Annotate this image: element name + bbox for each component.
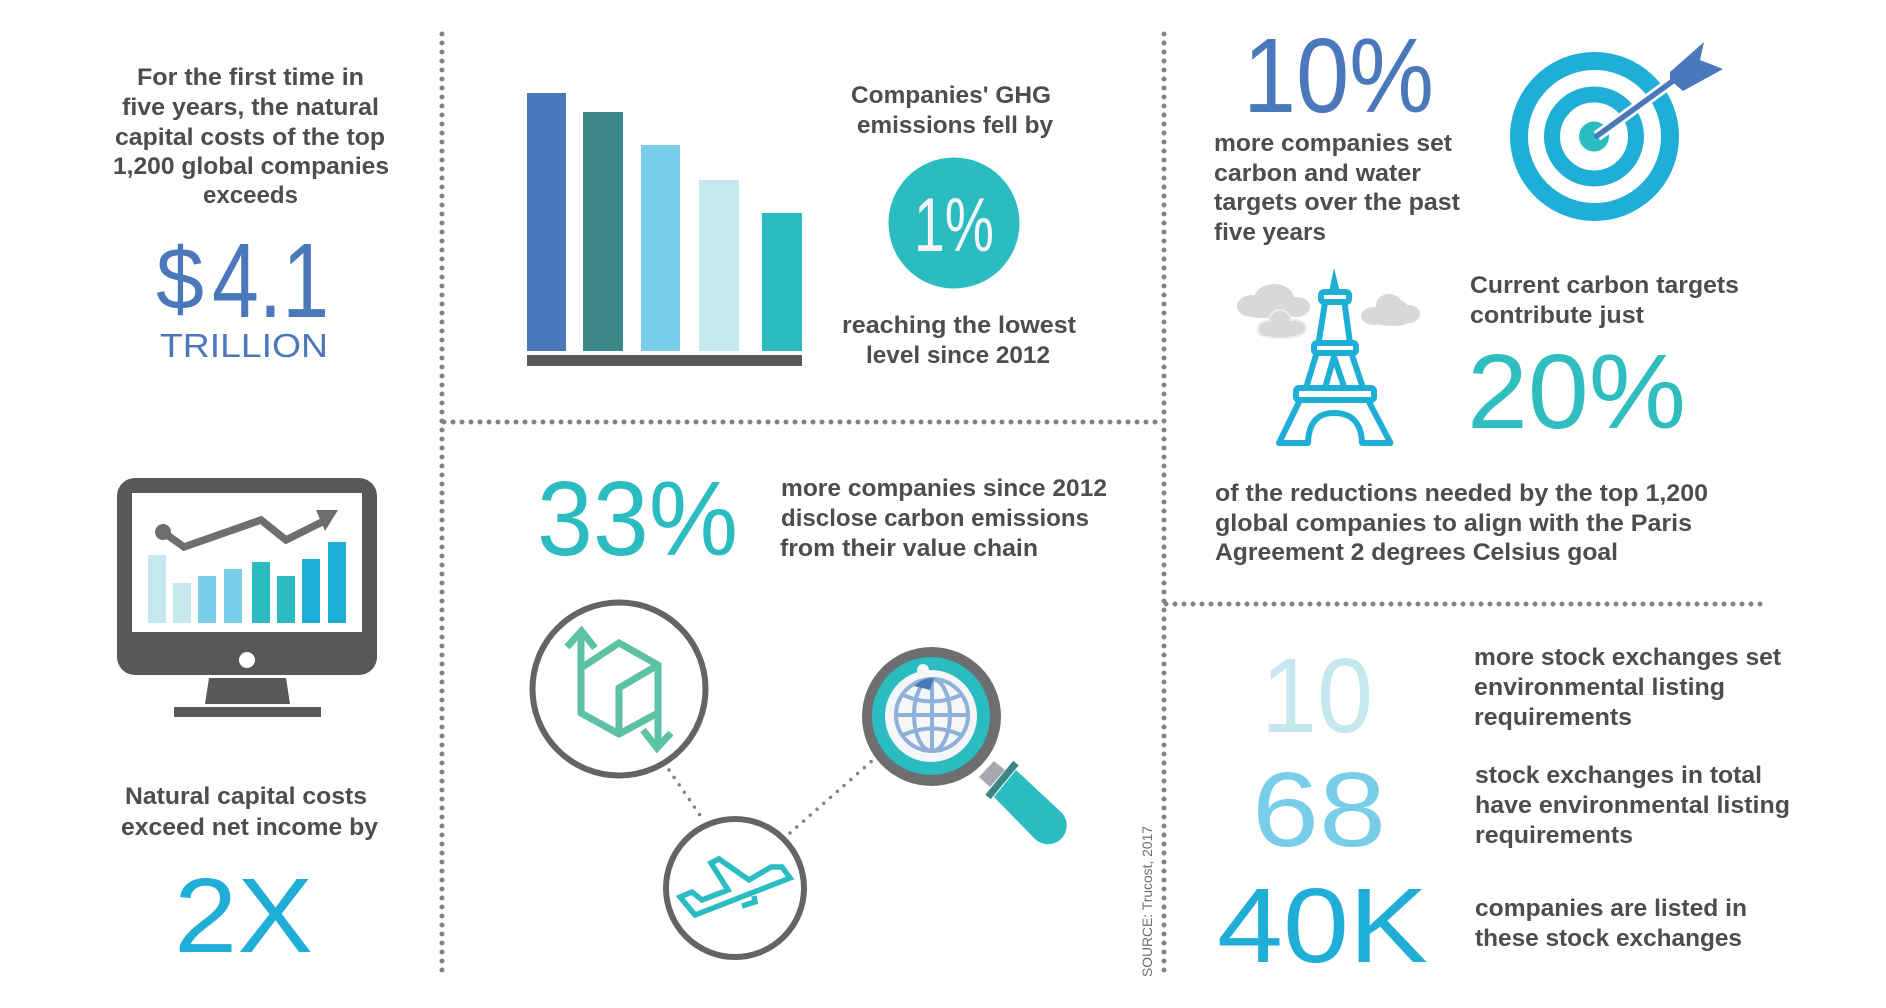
text: current carbon targets: [1470, 272, 1739, 329]
text: stock exchanges in total: stock exchanges in total: [1475, 762, 1762, 789]
text: companies listed: these stock exchanges: [1475, 925, 1742, 952]
stat: $4.1 trillion: $: [156, 229, 204, 328]
text: reaching the lowest level: [842, 312, 1076, 369]
connector: dotted links: [669, 760, 873, 833]
text: natural capital costs exceed net income: [121, 783, 379, 841]
stat: 1% circle: 1%: [914, 183, 994, 268]
text: current carbon targets: contribute just: [1470, 302, 1644, 329]
stat: 40K: 40K: [1217, 867, 1428, 985]
text: first time natural capital costs: exceeds: [203, 182, 298, 209]
text: companies GHG emissions fell: [851, 82, 1054, 139]
stat: 20%: 20%: [1467, 333, 1686, 451]
text: first time natural capital costs: capital costs of the top: [115, 124, 385, 151]
text: natural capital costs exceed net income: exceed net income by: [121, 814, 379, 841]
text: more companies set targets: targets over the past: [1214, 189, 1460, 216]
text: reaching the lowest level: reaching the lowest: [842, 312, 1076, 339]
text: reductions needed: Agreement 2 degrees Celsius goal: [1215, 539, 1618, 566]
text: current carbon targets: Current carbon targets: [1470, 272, 1739, 299]
text: companies listed: companies are listed in: [1475, 895, 1747, 922]
text: companies listed: [1475, 895, 1747, 952]
text: more companies disclose: disclose carbon emissions: [781, 505, 1089, 532]
bar chart: GHG emissions: [527, 93, 802, 366]
text: stock exchanges in total: requirements: [1475, 822, 1633, 849]
text: more companies disclose: from their value chain: [780, 535, 1038, 562]
icon: Eiffel tower: [1279, 268, 1390, 443]
text: reductions needed: [1215, 480, 1708, 566]
text: reductions needed: global companies to align with the Paris: [1215, 510, 1692, 537]
text: first time natural capital costs: 1,200 global companies: [113, 153, 389, 180]
stat: $4.1 trillion: 4.1: [212, 222, 329, 340]
stat: 1% circle: [888, 158, 1020, 288]
text: more companies set targets: more companies set: [1214, 130, 1452, 157]
text: more stock exchanges: more stock exchanges set: [1474, 644, 1781, 671]
icon: clouds: [1237, 284, 1420, 337]
stat: 2X: 2X: [174, 857, 313, 975]
text: reductions needed: of the reductions needed by the top 1,200: [1215, 480, 1708, 507]
stat: $4.1 trillion: [156, 222, 329, 364]
stat: 33%: 33%: [537, 460, 738, 578]
text: stock exchanges in total: have environmental listing: [1475, 792, 1790, 819]
text: stock exchanges in total: [1475, 762, 1790, 849]
icon: target with arrow: [1519, 42, 1723, 212]
icon: monitor with chart: [117, 478, 377, 717]
stat: 68: 68: [1252, 751, 1386, 869]
text: more companies set targets: five years: [1214, 219, 1326, 246]
text: more companies set targets: carbon and water: [1214, 160, 1421, 187]
stat: 10%: 10%: [1243, 17, 1434, 135]
text: first time natural capital costs: [113, 64, 389, 209]
text: first time natural capital costs: five years, the natural: [122, 94, 379, 121]
stat: $4.1 trillion: TRILLION: [160, 327, 328, 364]
text: first time natural capital costs: For the first time in: [137, 64, 364, 91]
text: more companies disclose: more companies since 2012: [781, 475, 1107, 502]
text: reaching the lowest level: level since 2012: [866, 342, 1050, 369]
icon: airplane in circle: [666, 819, 804, 957]
source note: SOURCE: Trucost, 2017: [1139, 826, 1155, 977]
text: companies GHG emissions fell: Companies' GHG: [851, 82, 1051, 109]
text: more companies disclose: [780, 475, 1107, 562]
stat: 10: 10: [1261, 637, 1373, 755]
text: more stock exchanges: environmental listing: [1474, 674, 1725, 701]
text: more stock exchanges: [1474, 644, 1781, 731]
text: companies GHG emissions fell: emissions fell by: [857, 112, 1054, 139]
text: natural capital costs exceed net income: Natural capital costs: [125, 783, 367, 810]
icon: magnifier with globe: [862, 647, 1067, 844]
icon: box with arrows in circle: [532, 602, 706, 776]
text: more companies set targets: [1214, 130, 1460, 246]
text: more stock exchanges: requirements: [1474, 704, 1632, 731]
